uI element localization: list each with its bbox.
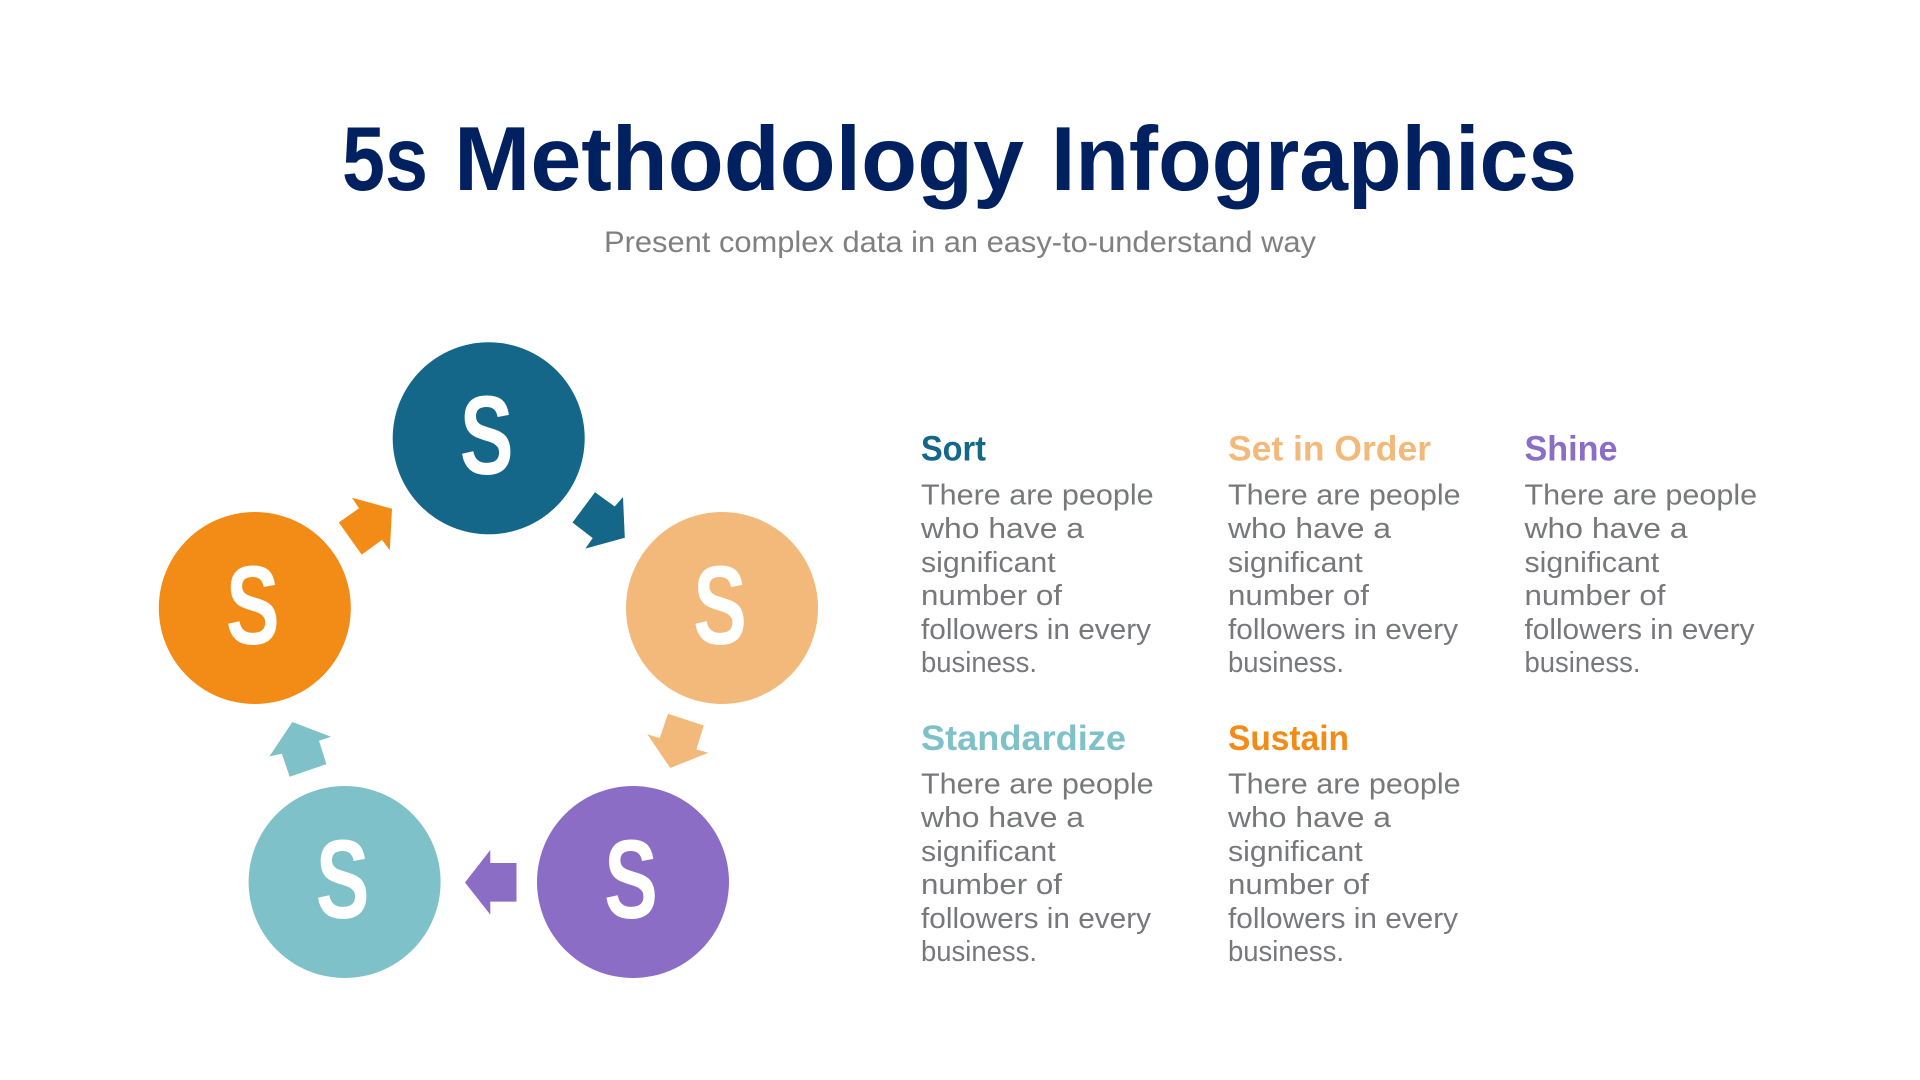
body: sort: significant (921, 547, 1056, 579)
body: sustain: followers in every (1228, 903, 1459, 935)
cycle diagram (159, 342, 818, 978)
circle: shine: S (604, 817, 658, 942)
body: standardize: business. (921, 936, 1037, 968)
body: shine: significant (1524, 547, 1659, 579)
body: set in order: number of (1228, 580, 1370, 612)
body: sort: number of (921, 580, 1063, 612)
title: 5s (342, 109, 428, 210)
circle: shine (537, 786, 729, 978)
heading: sustain: Sustain (1228, 719, 1349, 758)
arrow: shine to standardize (465, 850, 516, 915)
text block: sustain (1227, 719, 1461, 968)
body: sort: who have a (920, 513, 1085, 545)
body: set in order: who have a (1227, 513, 1392, 545)
body: set in order (1227, 480, 1461, 679)
circle: sort (393, 342, 585, 534)
body: shine: who have a (1523, 513, 1688, 545)
text block: standardize (920, 719, 1154, 968)
body: shine: business. (1524, 647, 1640, 679)
circle: sustain: S (226, 543, 280, 668)
title (342, 109, 1577, 210)
body: sustain: significant (1228, 836, 1363, 868)
text block: set in order (1227, 430, 1461, 679)
body: set in order: There are people (1228, 480, 1461, 512)
body: set in order: significant (1228, 547, 1363, 579)
title: Infographics (1051, 109, 1577, 210)
circle: standardize (249, 786, 441, 978)
arrow: sustain to sort (339, 498, 392, 555)
body: sustain: who have a (1227, 802, 1392, 834)
body: standardize: followers in every (921, 903, 1152, 935)
body: standardize (920, 768, 1154, 968)
body: standardize: who have a (920, 802, 1085, 834)
body: sort (920, 480, 1154, 679)
body: standardize: number of (921, 869, 1063, 901)
subtitle: Present complex data in an easy-to-understand way (604, 226, 1316, 259)
circle: set in order: S (693, 543, 747, 668)
heading: sort: Sort (921, 430, 986, 469)
heading: shine: Shine (1524, 430, 1618, 469)
body: sort: There are people (921, 480, 1154, 512)
body: sustain: number of (1228, 869, 1370, 901)
text block: shine (1523, 430, 1757, 679)
body: sustain (1227, 768, 1461, 968)
title: Methodology (454, 109, 1024, 210)
heading: standardize: Standardize (921, 719, 1126, 758)
circle: sort: S (460, 373, 513, 498)
body: shine: followers in every (1524, 614, 1755, 646)
arrow: sort to set in order (572, 492, 625, 549)
body: sort: followers in every (921, 614, 1152, 646)
body: sort: business. (921, 647, 1037, 679)
body: sustain: business. (1228, 936, 1344, 968)
body: standardize: significant (921, 836, 1056, 868)
circle: sustain (159, 512, 351, 704)
circle: standardize: S (316, 817, 369, 942)
circle: set in order (626, 512, 818, 704)
body: shine (1523, 480, 1757, 679)
arrow: standardize to sustain (270, 722, 331, 777)
body: sustain: There are people (1228, 768, 1461, 800)
body: shine: number of (1524, 580, 1667, 612)
body: standardize: There are people (921, 768, 1154, 800)
body: shine: There are people (1524, 480, 1757, 512)
body: set in order: followers in every (1228, 614, 1459, 646)
text block: sort (920, 430, 1154, 679)
body: set in order: business. (1228, 647, 1344, 679)
arrow: set in order to shine (647, 714, 708, 768)
heading: set in order: Set in Order (1228, 430, 1431, 469)
